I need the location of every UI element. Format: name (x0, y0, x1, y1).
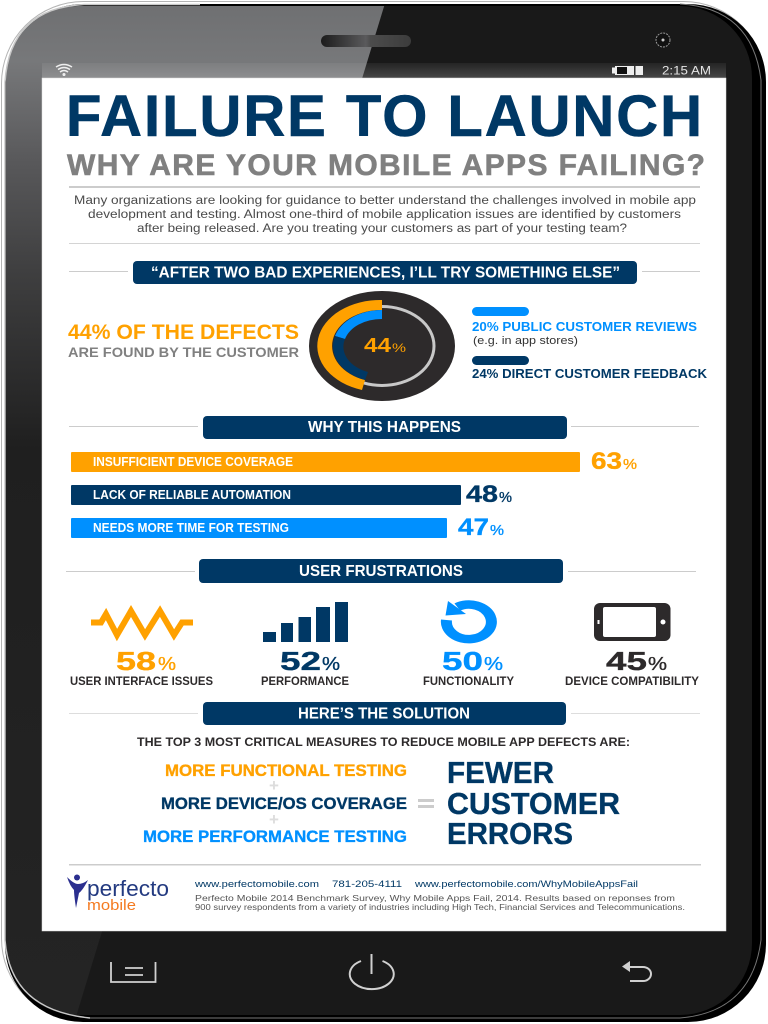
footer contact: www.perfectomobile.com/WhyMobileAppsFail (414, 879, 638, 890)
result: fewer customer errors: CUSTOMER (447, 786, 620, 821)
speaker (321, 35, 411, 47)
icon: signal bars (263, 602, 348, 642)
bar: time for testing: % (490, 522, 504, 539)
icon: refresh arrow (446, 601, 491, 639)
solution measures: + (269, 810, 279, 829)
icon: menu button (111, 962, 156, 982)
bar: automation (71, 481, 512, 508)
bar: time for testing: NEEDS MORE TIME FOR TESTING (93, 520, 289, 535)
solution measures: MORE FUNCTIONAL TESTING (165, 761, 407, 780)
solution measures: + (269, 776, 279, 795)
solution measures (143, 761, 407, 846)
solution measures: MORE DEVICE/OS COVERAGE (161, 794, 407, 813)
bar: automation: 48 (466, 481, 498, 508)
stat: device compatibility (565, 603, 699, 688)
banner: user frustrations (199, 559, 563, 583)
intro paragraph (74, 195, 696, 235)
footer contact: 781-205-4111 (332, 879, 402, 890)
banner: why this happens: WHY THIS HAPPENS (308, 419, 461, 436)
footer source note: Perfecto Mobile 2014 Benchmark Survey, Why Mobile Apps Fail, 2014. Results based on reponses from (195, 894, 675, 903)
stat: device compatibility: DEVICE COMPATIBILITY (565, 676, 699, 688)
stat: user interface issues: 58 (116, 646, 156, 676)
stat: performance (261, 602, 349, 688)
clock: 2:15 AM (662, 66, 711, 78)
icon: front camera (656, 33, 670, 47)
result: fewer customer errors: ERRORS (447, 816, 573, 851)
result: fewer customer errors: FEWER (447, 755, 554, 790)
banner: quote: “AFTER TWO BAD EXPERIENCES, I’LL TRY SOMETHING ELSE” (151, 264, 620, 282)
solution measures: MORE PERFORMANCE TESTING (143, 827, 407, 846)
icon: power button (350, 954, 394, 989)
bar: time for testing: 47 (458, 514, 489, 541)
defects headline: 44% OF THE DEFECTS (68, 321, 299, 344)
title: FAILURE TO LAUNCH (66, 84, 702, 149)
intro paragraph: Many organizations are looking for guidance to better understand the challenges involved in mobile app (74, 195, 696, 207)
bar: time for testing (71, 514, 504, 541)
icon: battery (612, 66, 643, 75)
legend (472, 307, 708, 381)
stat: performance: % (322, 654, 340, 674)
logo: perfecto mobile (67, 874, 169, 914)
stat: performance: PERFORMANCE (261, 676, 349, 688)
subtitle: WHY ARE YOUR MOBILE APPS FAILING? (67, 149, 705, 182)
icon: tablet (594, 603, 670, 641)
footer source note: 900 survey respondents from a variety of industries including High Tech, Financial Services and Telecommunications. (195, 903, 685, 912)
intro paragraph: after being released. Are you treating your customers as part of your testing team? (137, 223, 627, 235)
stat: performance: 52 (280, 646, 321, 676)
stat: user interface issues: USER INTERFACE ISSUES (70, 676, 213, 688)
banner: here's the solution: HERE’S THE SOLUTION (298, 706, 470, 722)
bar: device coverage: 63 (591, 448, 622, 475)
equals sign (418, 799, 434, 808)
bar: automation: LACK OF RELIABLE AUTOMATION (93, 487, 291, 502)
stat: device compatibility: % (648, 654, 667, 674)
stat: functionality: % (484, 654, 503, 674)
bar chart: why this happens (71, 448, 637, 541)
stat: functionality: 50 (442, 646, 483, 676)
footer source note (195, 894, 685, 912)
banner: user frustrations: USER FRUSTRATIONS (299, 563, 463, 580)
icon: back button (622, 961, 651, 981)
banner: here's the solution (203, 702, 566, 725)
defects headline: ARE FOUND BY THE CUSTOMER (68, 344, 299, 360)
logo: perfecto mobile: mobile (87, 897, 136, 914)
donut chart: 44 (364, 335, 392, 357)
bar: device coverage (71, 448, 637, 475)
bar: device coverage: INSUFFICIENT DEVICE COVERAGE (93, 454, 293, 469)
stat: functionality (423, 601, 514, 688)
solution intro: THE TOP 3 MOST CRITICAL MEASURES TO REDUCE MOBILE APP DEFECTS ARE: (137, 735, 630, 749)
defects headline (68, 321, 299, 360)
icon: zigzag (91, 611, 193, 635)
bar: device coverage: % (623, 456, 637, 473)
banner: why this happens (203, 416, 567, 439)
icon: wifi (56, 64, 72, 75)
stat: functionality: FUNCTIONALITY (423, 676, 514, 688)
bar: automation: % (499, 489, 512, 506)
footer contact: www.perfectomobile.com (194, 879, 319, 890)
footer contact (194, 879, 638, 890)
result: fewer customer errors (447, 755, 620, 851)
logo: perfecto mobile: perfecto (87, 876, 169, 901)
stat: user interface issues (70, 611, 213, 688)
legend: 20% PUBLIC CUSTOMER REVIEWS (472, 319, 697, 334)
donut chart: % (392, 341, 406, 355)
legend: 24% DIRECT CUSTOMER FEEDBACK (472, 366, 708, 381)
status bar (42, 63, 726, 78)
intro paragraph: development and testing. Almost one-third of mobile application issues are identified by customers (88, 209, 681, 221)
screen (42, 78, 726, 931)
stat: user interface issues: % (158, 654, 176, 674)
legend: (e.g. in app stores) (473, 335, 578, 347)
donut chart (309, 291, 455, 401)
stat: device compatibility: 45 (606, 646, 647, 676)
